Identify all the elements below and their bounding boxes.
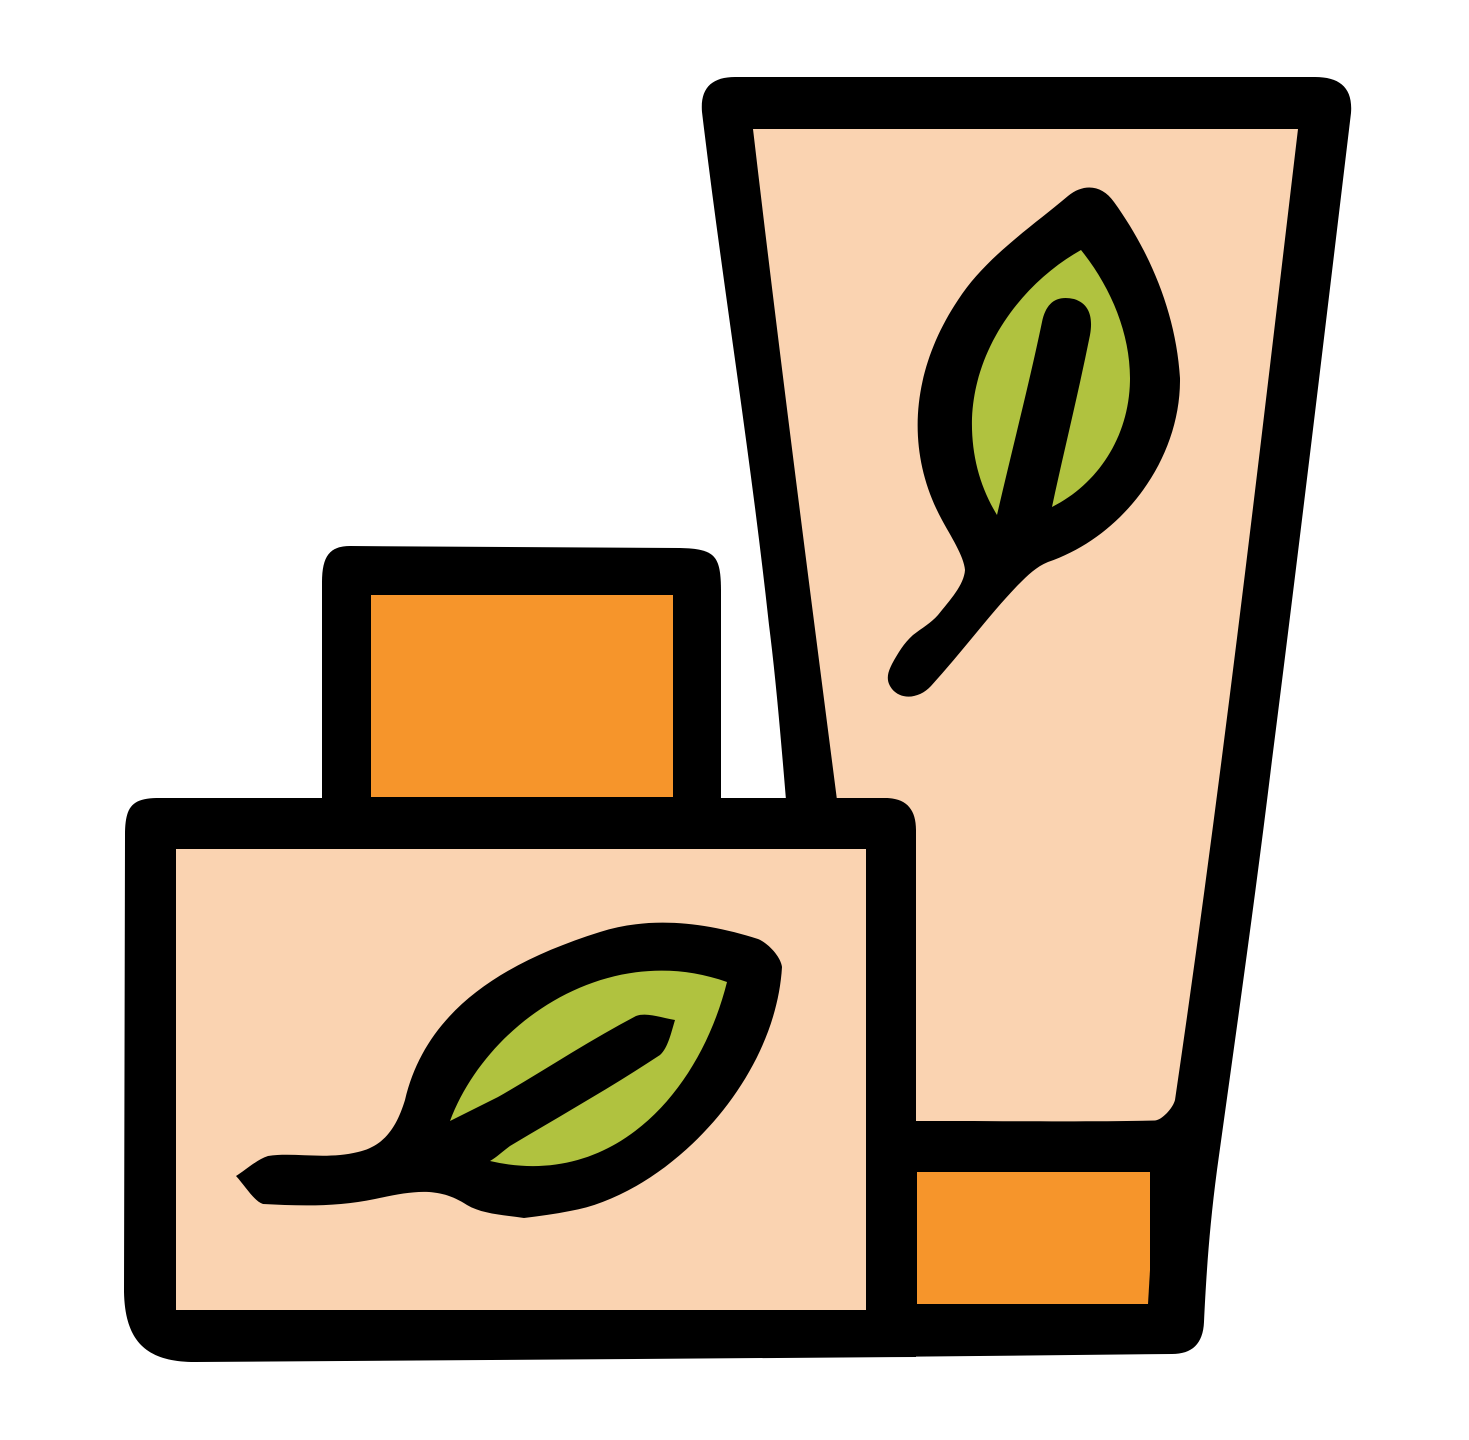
jar leaf outline [236,923,782,1218]
jar [124,546,916,1362]
tube leaf fill [972,250,1130,515]
tube leaf outline [888,188,1180,697]
jar body outline [124,798,916,1362]
tube outline [702,77,1351,1357]
jar lid fill [371,595,673,797]
jar lid outline [322,546,721,830]
jar leaf fill [450,971,727,1166]
tube cap [917,1172,1150,1304]
tube body [753,129,1298,1121]
tube [702,77,1351,1357]
jar body fill [176,849,866,1310]
